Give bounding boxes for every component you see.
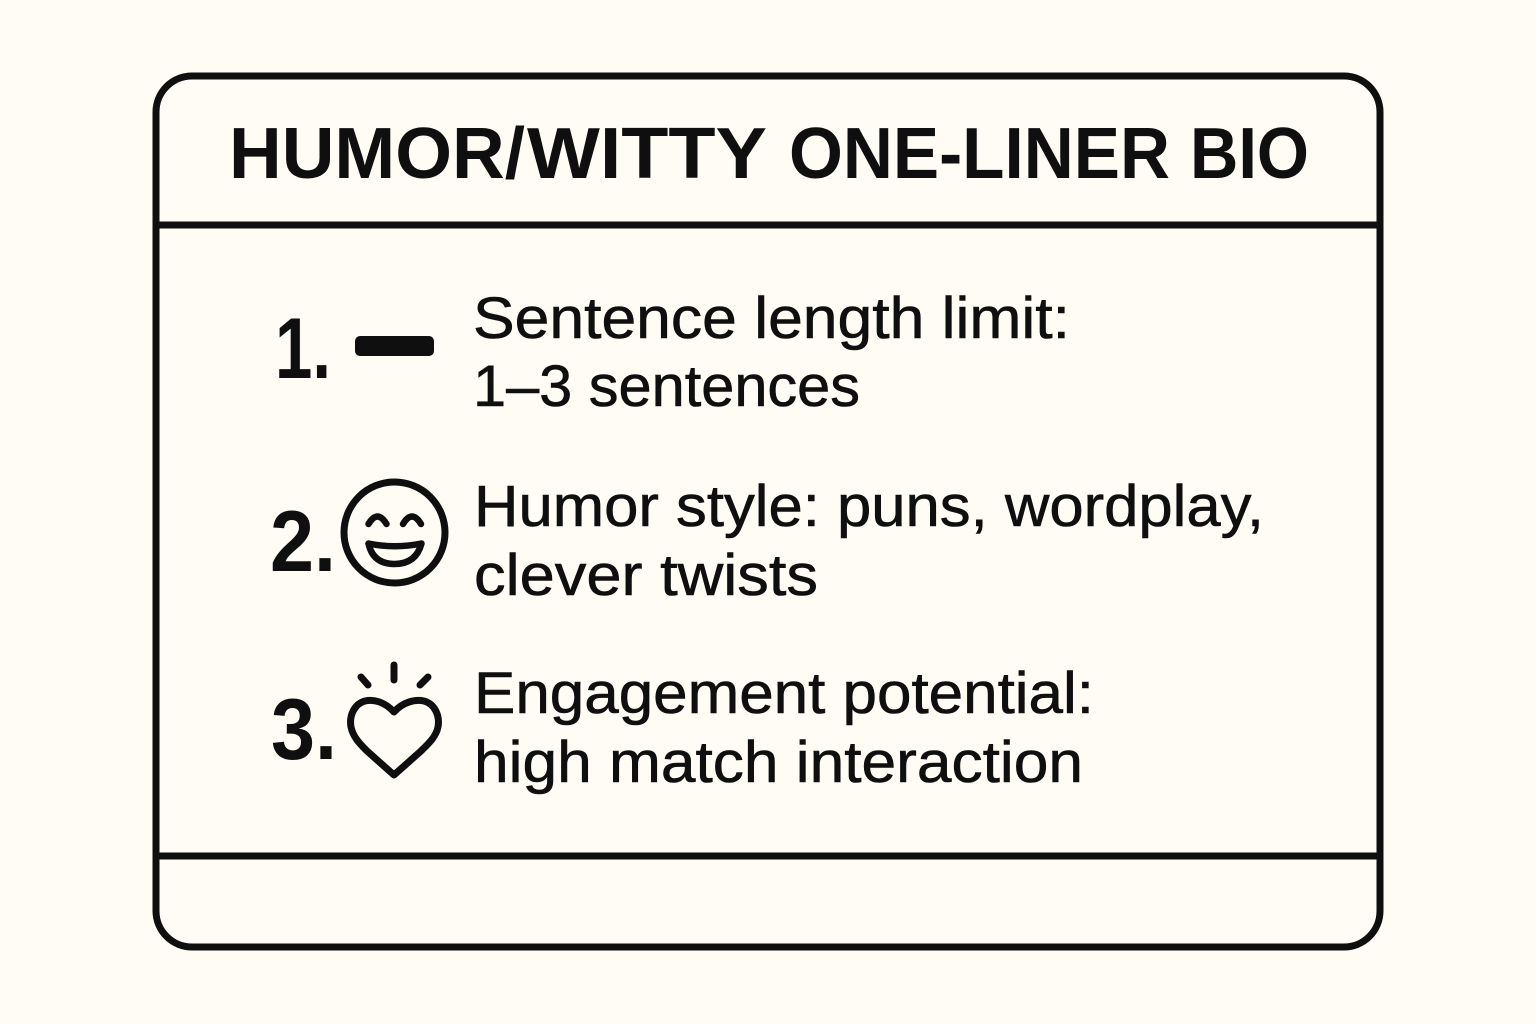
icon: dash [355, 336, 434, 356]
item 3: engagement potential [271, 661, 1094, 795]
text: sentence length limit [473, 286, 1070, 419]
number 3: 3. [271, 682, 337, 778]
text: sentence length limit: 1–3 sentences [473, 354, 860, 419]
text: humor style: Humor style: puns, wordplay, [474, 474, 1264, 539]
item 2: humor style [270, 474, 1264, 608]
text: engagement potential [474, 661, 1094, 795]
icon: laughing face [344, 482, 445, 583]
title: HUMOR/ [229, 114, 525, 194]
card panel [156, 76, 1380, 947]
number 1: 1. [275, 301, 331, 397]
title: ONE-LINER [789, 114, 1170, 194]
title [229, 114, 1309, 194]
title: WITTY [527, 114, 767, 194]
title: BIO [1190, 114, 1309, 194]
number 2: 2. [270, 494, 336, 590]
text: engagement potential: Engagement potential: [474, 661, 1094, 726]
icon: heart with sparks [351, 665, 438, 775]
item 1: sentence length limit [275, 286, 1070, 419]
text: sentence length limit: Sentence length limit: [473, 286, 1070, 351]
text: humor style [474, 474, 1264, 608]
text: engagement potential: high match interaction [474, 730, 1083, 795]
text: humor style: clever twists [474, 543, 818, 608]
